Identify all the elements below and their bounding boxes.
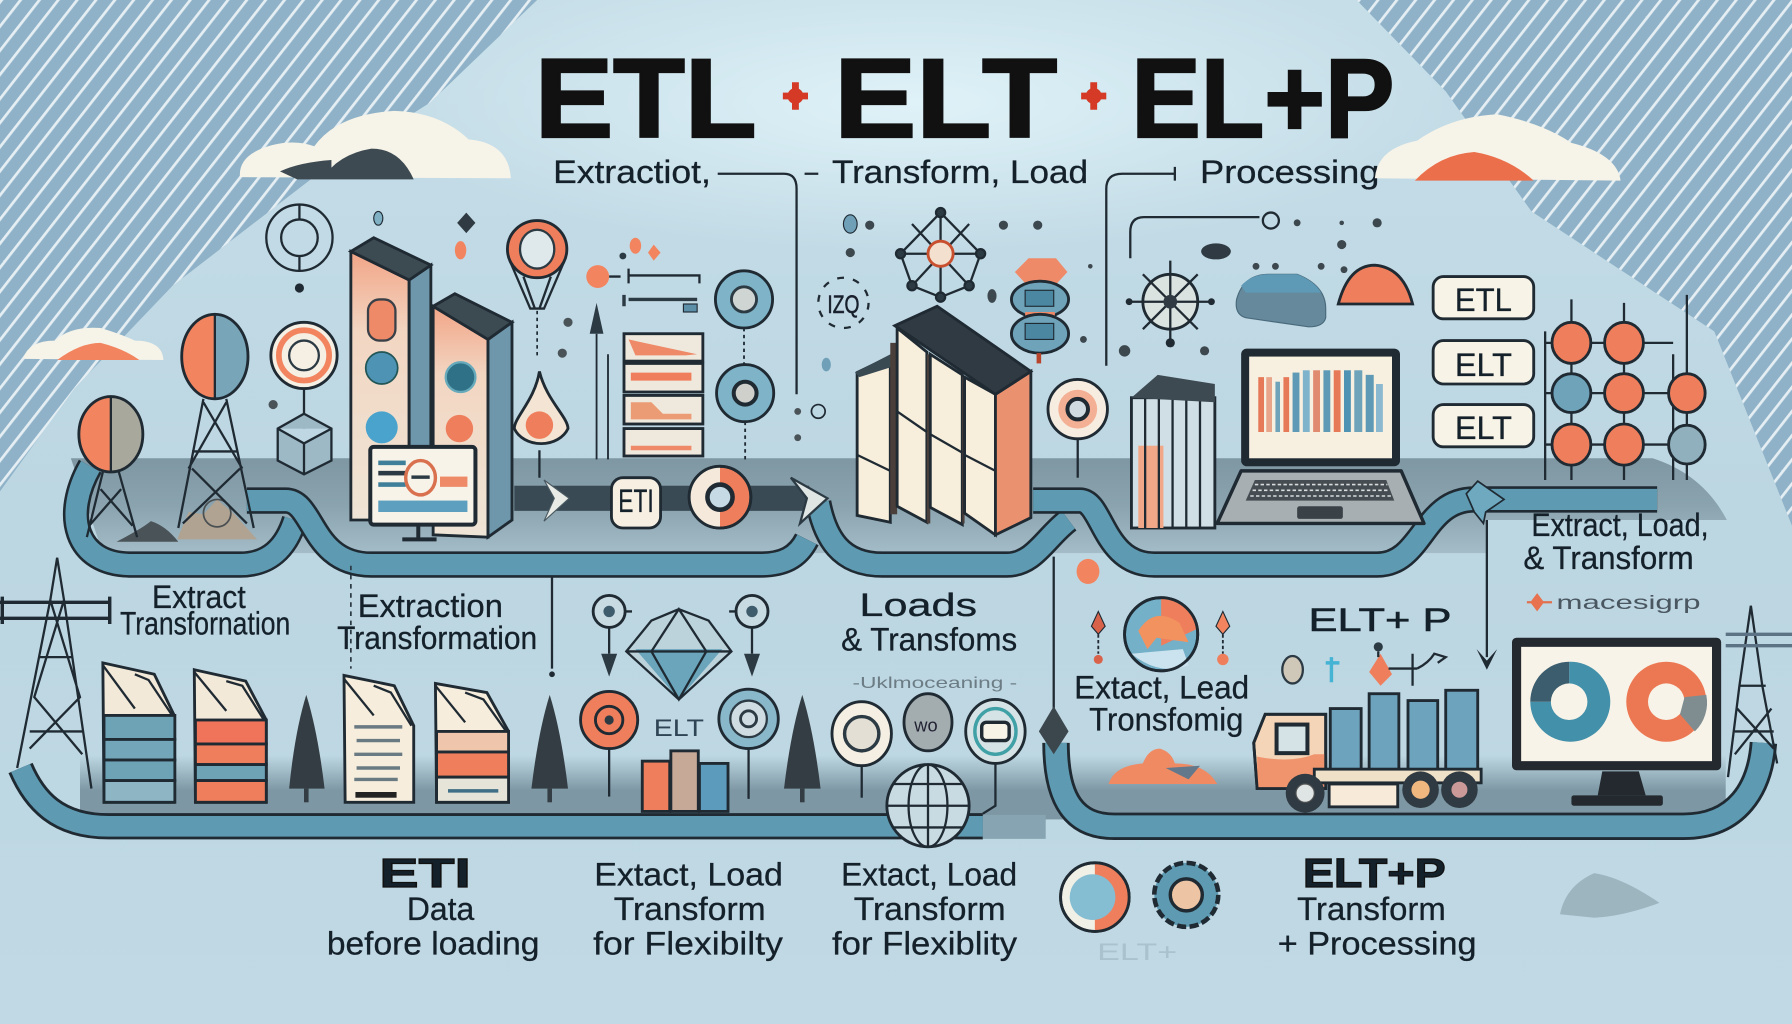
- icon: target pin: [1048, 379, 1107, 478]
- caption: extract load transform 2: for Flexiblity: [832, 925, 1017, 961]
- vertical arrow up: [1039, 557, 1069, 754]
- flow connector with arrows, ETI badge and donut: [514, 466, 827, 528]
- faint label: ELT+: [1097, 939, 1177, 966]
- icon: small scribble circle: [818, 278, 869, 328]
- subtitle row: [553, 154, 1379, 394]
- text: extraction transformation: [337, 588, 537, 656]
- text: loads and transforms: [841, 587, 1017, 692]
- text: extract transformation: Transfornation: [120, 605, 290, 641]
- text: extract load transforming: Tronsfomig: [1089, 701, 1243, 737]
- badge: ELT 2: ELT: [1455, 410, 1512, 446]
- caption: extract load transform 2: [832, 857, 1017, 961]
- text: loads and transforms: & Transfoms: [841, 621, 1017, 657]
- heading: ELT+ P: ELT+ P: [1309, 602, 1451, 638]
- text: extract transformation: [120, 579, 290, 641]
- badge: ETL: [1433, 277, 1534, 319]
- cloud: small left: [23, 328, 163, 360]
- tower B: [433, 294, 512, 537]
- orange dot: [1077, 559, 1099, 584]
- scattered dots top left: [269, 211, 831, 441]
- icon: globe: [887, 765, 969, 847]
- circle on stem: screen: [966, 699, 1025, 814]
- icon: bottom ring: [1061, 863, 1129, 931]
- badge: ELT 1: ELT: [1455, 347, 1512, 383]
- caption: ELT+P transform processing: Transform: [1297, 891, 1446, 927]
- grey blob: [1560, 873, 1659, 918]
- oval icon grey: [904, 694, 952, 751]
- icon: teardrop: [514, 371, 568, 478]
- badge: ETL: ETL: [1455, 282, 1512, 318]
- caption: ETI data before loading: ETI: [379, 850, 471, 896]
- text: loads and transforms: Loads: [859, 587, 977, 623]
- caption: ELT+P transform processing: [1278, 850, 1477, 961]
- text: extract load and transform: Extract, Load,: [1531, 507, 1709, 543]
- text: extraction transformation: Extraction: [358, 588, 503, 624]
- caption: extract load transform 1: Extact, Load: [594, 857, 783, 893]
- text: extract load transforming: [1074, 669, 1249, 737]
- tower with balloon 1: [79, 397, 143, 537]
- text: extract load and transform: [1523, 507, 1709, 614]
- scattered dots top centre and right: [843, 215, 1382, 357]
- caption: ETI data before loading: [327, 850, 539, 961]
- icons: ring circles: [715, 271, 774, 459]
- flow connector with arrows, ETI badge and donut: ETI: [618, 483, 654, 519]
- vertical divider 2: [549, 577, 555, 677]
- rock pile: [117, 499, 257, 542]
- text: extract load and transform: macesigrp: [1557, 592, 1701, 614]
- document 1: [103, 663, 175, 802]
- caption: ELT+P transform processing: + Processing: [1278, 925, 1477, 961]
- caption: extract load transform 1: [593, 857, 783, 961]
- node grid: [1545, 295, 1705, 480]
- title: EL+P: [1131, 36, 1394, 161]
- circle orange on stem: [581, 691, 638, 797]
- text: extract transformation: Extract: [152, 579, 246, 615]
- pin with down arrow right: [729, 595, 768, 677]
- text: extract load and transform: & Transform: [1523, 540, 1694, 576]
- circle on stem: cup: [832, 702, 891, 798]
- laptop: [1217, 349, 1424, 523]
- pylon right: [1726, 606, 1792, 777]
- pin with down arrow left: [593, 595, 632, 677]
- monitor in front of towers: [370, 447, 475, 539]
- icon: wheel: [266, 205, 333, 291]
- badge: ELT 1: [1433, 341, 1534, 384]
- circle blue on stem: [719, 689, 778, 799]
- caption: extract load transform 2: Transform: [854, 891, 1006, 927]
- tower A: [351, 238, 431, 520]
- icon: ship wheel: [1126, 261, 1215, 347]
- text: loads and transforms: -Uklmoceaning -: [853, 675, 1017, 692]
- icon: small scribble circle: IZQ: [827, 291, 859, 319]
- title: ETL: [535, 36, 757, 161]
- document 3: [344, 675, 414, 802]
- caption: ELT+P transform processing: ELT+P: [1303, 850, 1446, 896]
- icon: bottom gear: [1154, 863, 1218, 927]
- small connector bars: [586, 265, 699, 312]
- oval icon grey: wo: [913, 714, 938, 735]
- connector: upper right: [1130, 213, 1279, 258]
- subtitle row: Processing: [1200, 154, 1379, 190]
- caption: ETI data before loading: before loading: [327, 925, 539, 961]
- caption: extract load transform 1: for Flexibilty: [593, 925, 783, 961]
- text: extract load transforming: Extact, Lead: [1074, 669, 1249, 705]
- caption: extract load transform 2: Extact, Load: [841, 857, 1017, 893]
- subtitle row: Extractiot,: [553, 154, 711, 190]
- document 2: [194, 670, 266, 802]
- orange mat: [1109, 749, 1217, 784]
- road arrow marker: [1466, 481, 1504, 523]
- lower ground band: [80, 755, 1726, 819]
- upper pipeline road: [76, 466, 1657, 565]
- icon: target on box: [271, 322, 337, 474]
- caption: extract load transform 1: Transform: [614, 891, 766, 927]
- icon: diamond: [626, 609, 731, 699]
- icon: blue device: [1236, 274, 1326, 327]
- label: ELT small: ELT: [654, 715, 704, 742]
- icon: network: [896, 208, 985, 302]
- lower pipeline road: [21, 743, 1763, 839]
- icon: orange dome: [1338, 265, 1413, 304]
- mini bar chart: [642, 751, 728, 811]
- tree 2: [531, 695, 568, 802]
- caption: ETI data before loading: Data: [407, 891, 474, 927]
- central building: [855, 306, 1031, 535]
- dashed divider 1: [350, 566, 352, 669]
- tree 3: [784, 695, 821, 802]
- upward arrow: [590, 303, 608, 459]
- tree 1: [289, 695, 325, 802]
- badge: ELT 2: [1433, 405, 1534, 447]
- title: ELT: [834, 36, 1057, 161]
- small markers beside pie: [1091, 611, 1230, 665]
- stacked icon: [1011, 258, 1069, 363]
- upper ground band: [71, 458, 1727, 553]
- striped tower: [1131, 375, 1215, 528]
- panel stack: [624, 334, 703, 456]
- icon: balloon pin: [507, 221, 567, 357]
- document 4: [435, 683, 509, 802]
- subtitle row: Transform, Load: [832, 154, 1088, 190]
- cloud: top right: [1375, 114, 1621, 181]
- monitor with donut charts: [1512, 638, 1721, 806]
- text: extraction transformation: Transformation: [337, 620, 537, 656]
- icon: pie circle: [1125, 598, 1198, 671]
- tower with balloon 2: [178, 314, 254, 528]
- cloud: top left: [240, 111, 511, 179]
- small process markers: [1282, 642, 1446, 686]
- truck: [1254, 690, 1481, 813]
- pylon left: [0, 558, 111, 789]
- long down arrow: [1477, 520, 1497, 670]
- title: [535, 36, 1394, 161]
